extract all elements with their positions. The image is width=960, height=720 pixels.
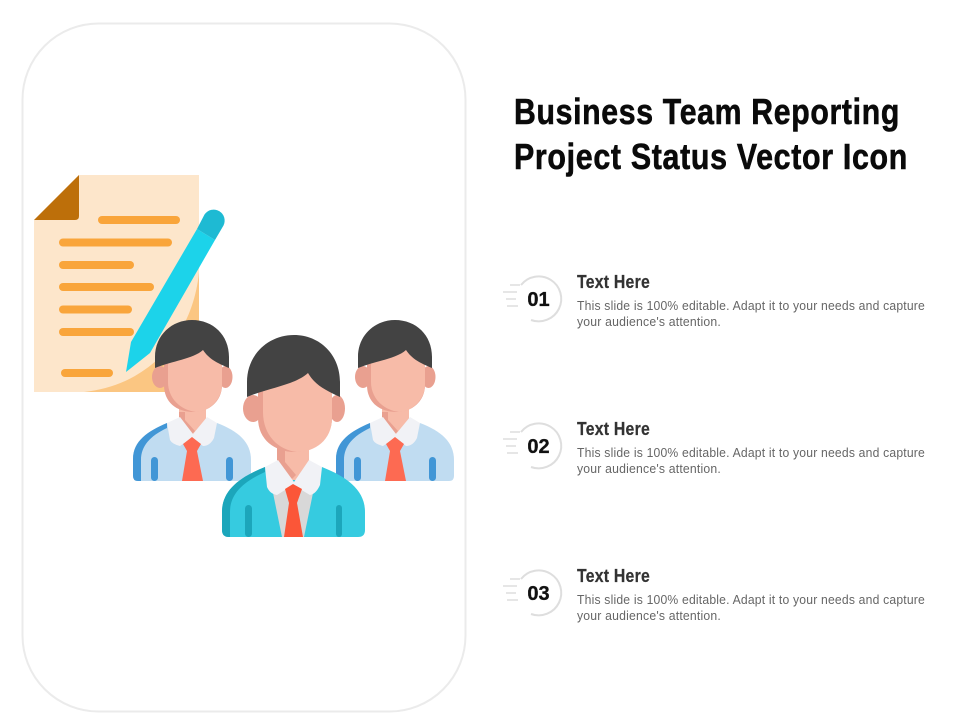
text block 01: This slide is 100% editable. Adapt it to your needs and capture <box>577 298 925 313</box>
text block 02: Text Here <box>577 418 650 439</box>
text block 01: Text Here <box>577 271 650 292</box>
text block 02 <box>577 418 925 476</box>
icon: left team member <box>133 320 251 481</box>
icon: front team member <box>222 335 365 537</box>
text block 03: This slide is 100% editable. Adapt it to your needs and capture <box>577 592 925 607</box>
text block 02: This slide is 100% editable. Adapt it to your needs and capture <box>577 445 925 460</box>
icon: number badge 01 <box>503 276 561 321</box>
icon: number badge 01: 01 <box>527 289 550 311</box>
title <box>514 91 908 177</box>
text block 03: your audience's attention. <box>577 608 721 623</box>
text block 03 <box>577 565 925 623</box>
icon: number badge 03: 03 <box>527 583 550 605</box>
list item 01 <box>503 271 925 329</box>
icon: report document <box>34 175 199 392</box>
icon: right team member <box>336 320 454 481</box>
text block 02: your audience's attention. <box>577 461 721 476</box>
text block 03: Text Here <box>577 565 650 586</box>
list item 03 <box>503 565 925 623</box>
icon: number badge 02: 02 <box>527 436 550 458</box>
icon: number badge 03 <box>503 570 561 615</box>
icon: pen <box>126 210 225 372</box>
icon: number badge 02 <box>503 423 561 468</box>
text block 01 <box>577 271 925 329</box>
list item 02 <box>503 418 925 476</box>
panel: illustration card <box>22 24 466 712</box>
text block 01: your audience's attention. <box>577 314 721 329</box>
